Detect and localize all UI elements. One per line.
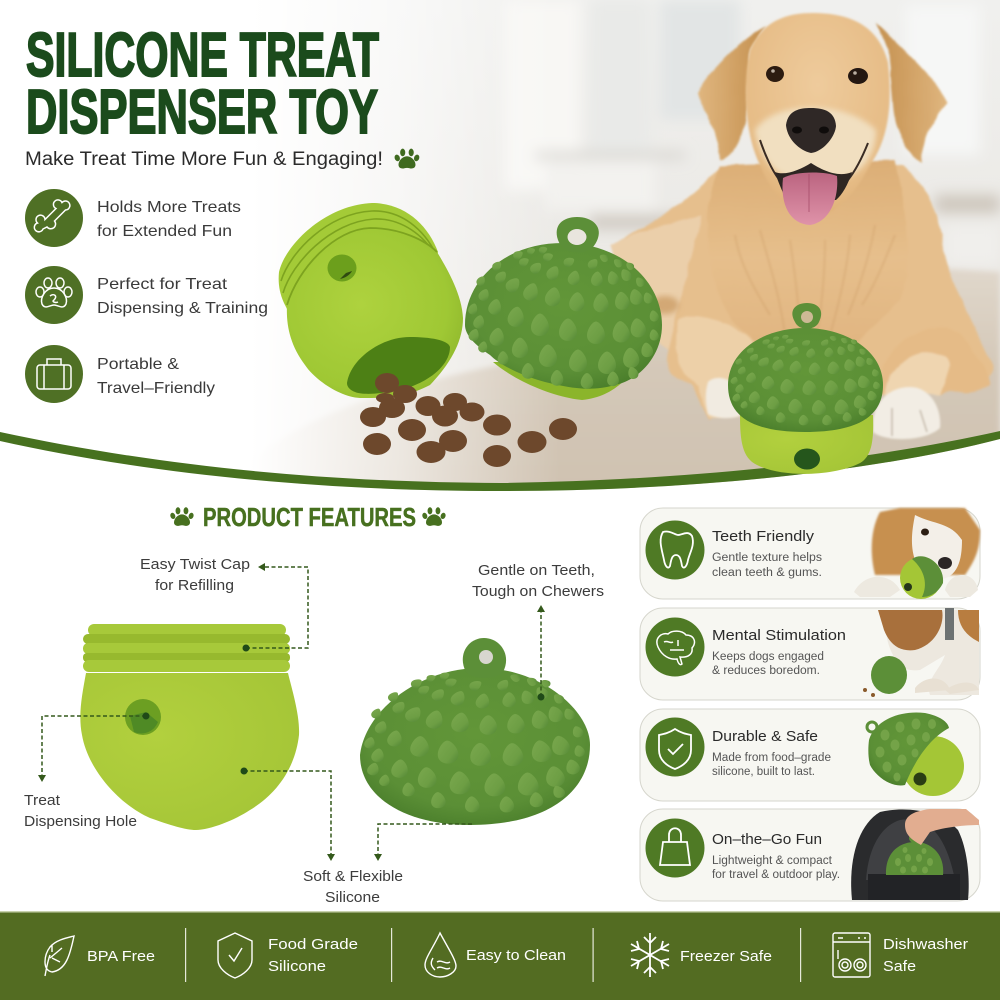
nose — [786, 108, 836, 153]
label — [97, 276, 268, 317]
card: teeth friendly: Gentle texture helps — [712, 552, 822, 564]
label: Holds More Treats — [97, 199, 241, 216]
product: textured cap — [357, 638, 591, 825]
card: durable and safe — [640, 709, 980, 801]
card: teeth friendly: clean teeth & gums. — [712, 567, 822, 579]
card: on the go fun — [640, 809, 980, 901]
badge: dishwasher safe: Dishwasher — [883, 936, 968, 953]
icon: bag — [646, 818, 704, 878]
hip shadow — [651, 296, 679, 314]
toy: lime base tilted with treat opening — [279, 203, 463, 398]
callout: soft and flexible silicone — [240, 768, 472, 906]
title: DISPENSER TOY — [26, 78, 378, 147]
card: on the go fun: Lightweight & compact — [712, 855, 833, 867]
subtitle: Make Treat Time More Fun & Engaging! — [25, 149, 383, 170]
head — [746, 13, 890, 218]
side hole — [328, 254, 356, 282]
toy: textured green cap lying on floor — [465, 217, 662, 400]
muzzle — [755, 108, 876, 182]
callout: gentle on teeth: Tough on Chewers — [472, 584, 604, 600]
heading: product features: PRODUCT FEATURES — [203, 502, 416, 532]
label — [97, 199, 241, 240]
label: Perfect for Treat — [97, 276, 228, 293]
label: Travel–Friendly — [97, 380, 215, 397]
mouth — [760, 140, 868, 200]
body — [287, 228, 463, 398]
benefit: portable — [25, 345, 215, 403]
text: Durable & Safe — [712, 728, 818, 745]
label: Portable & — [97, 356, 179, 373]
badge: food grade silicone: Food Grade — [268, 936, 358, 953]
left foreleg — [676, 316, 755, 418]
callout: easy twist cap — [140, 557, 308, 652]
opening — [347, 337, 450, 394]
footer band — [0, 911, 1000, 1000]
callout: gentle on teeth: Gentle on Teeth, — [478, 563, 595, 579]
photo: toy — [867, 712, 964, 796]
product: lime base — [80, 624, 299, 830]
paws — [706, 378, 940, 439]
badge: freezer safe — [631, 933, 772, 977]
callout: gentle on teeth — [472, 563, 604, 700]
callout: treat dispensing hole: Treat — [24, 793, 60, 809]
photo: dog chewing toy — [854, 508, 980, 599]
card: mental stimulation — [640, 608, 980, 700]
arrow — [242, 563, 308, 652]
photo: dog sniffing toy — [863, 608, 979, 697]
label: for Extended Fun — [97, 223, 232, 240]
toy: assembled acorn — [726, 303, 884, 474]
dog body — [610, 160, 993, 420]
card: teeth friendly — [640, 508, 980, 599]
text: Teeth Friendly — [712, 528, 815, 545]
carpet — [240, 268, 1000, 490]
badge: bpa free: BPA Free — [87, 948, 155, 965]
eyes — [766, 66, 868, 84]
icon: paw outline — [25, 266, 83, 324]
icon: bone — [25, 189, 83, 247]
hind quarter — [610, 215, 702, 350]
badge: freezer safe: Freezer Safe — [680, 948, 772, 965]
tongue — [782, 172, 837, 225]
arrow — [38, 712, 150, 782]
icon: suitcase — [25, 345, 83, 403]
icon: paw — [395, 149, 419, 169]
card: on the go fun: for travel & outdoor play. — [712, 869, 840, 881]
badge: food grade silicone: Silicone — [268, 958, 326, 975]
callout: easy twist cap: for Refilling — [155, 578, 234, 594]
label: Dispensing & Training — [97, 300, 268, 317]
card: mental stimulation: Keeps dogs engaged — [712, 651, 824, 663]
icon: paw right — [422, 507, 446, 526]
text: On–the–Go Fun — [712, 831, 822, 848]
right foreleg — [880, 327, 990, 395]
benefit: perfect for treat dispensing — [25, 266, 268, 324]
card: durable and safe: Made from food–grade — [712, 752, 831, 764]
icon: paw left — [170, 507, 194, 526]
icon: shield — [646, 718, 704, 776]
badge: dishwasher safe: Safe — [883, 958, 916, 975]
badge: food grade silicone — [218, 933, 358, 978]
badge: easy to clean — [425, 933, 566, 977]
arrow — [537, 605, 545, 700]
chest fur — [708, 160, 908, 355]
badge: easy to clean: Easy to Clean — [466, 947, 566, 964]
golden retriever dog — [610, 13, 993, 439]
card: durable and safe: silicone, built to last. — [712, 766, 815, 778]
white lower page and green swoosh — [0, 431, 1000, 1000]
callout: soft and flexible silicone: Silicone — [325, 890, 380, 906]
badge: dishwasher safe — [833, 933, 968, 977]
right ear — [875, 23, 948, 163]
text: Mental Stimulation — [712, 627, 846, 644]
title — [26, 21, 379, 147]
icon: brain — [646, 618, 704, 676]
label — [97, 356, 215, 397]
icon: tooth — [646, 520, 704, 580]
screw rims — [279, 203, 438, 315]
title: SILICONE TREAT — [26, 21, 379, 90]
callout: treat dispensing hole — [24, 712, 150, 830]
left ear — [698, 25, 765, 160]
benefit: holds more treats — [25, 189, 241, 247]
badge: bpa free — [45, 936, 155, 976]
treats: kibble pile — [360, 373, 577, 467]
fur strands — [735, 225, 895, 345]
callout: soft and flexible silicone: Soft & Flexible — [303, 869, 403, 885]
hero background photo — [0, 0, 1000, 490]
card: mental stimulation: & reduces boredom. — [712, 665, 820, 677]
callout: treat dispensing hole: Dispensing Hole — [24, 814, 137, 830]
photo: backpack with toy and hand — [851, 809, 979, 900]
arrows — [240, 768, 472, 861]
callout: easy twist cap: Easy Twist Cap — [140, 557, 250, 573]
